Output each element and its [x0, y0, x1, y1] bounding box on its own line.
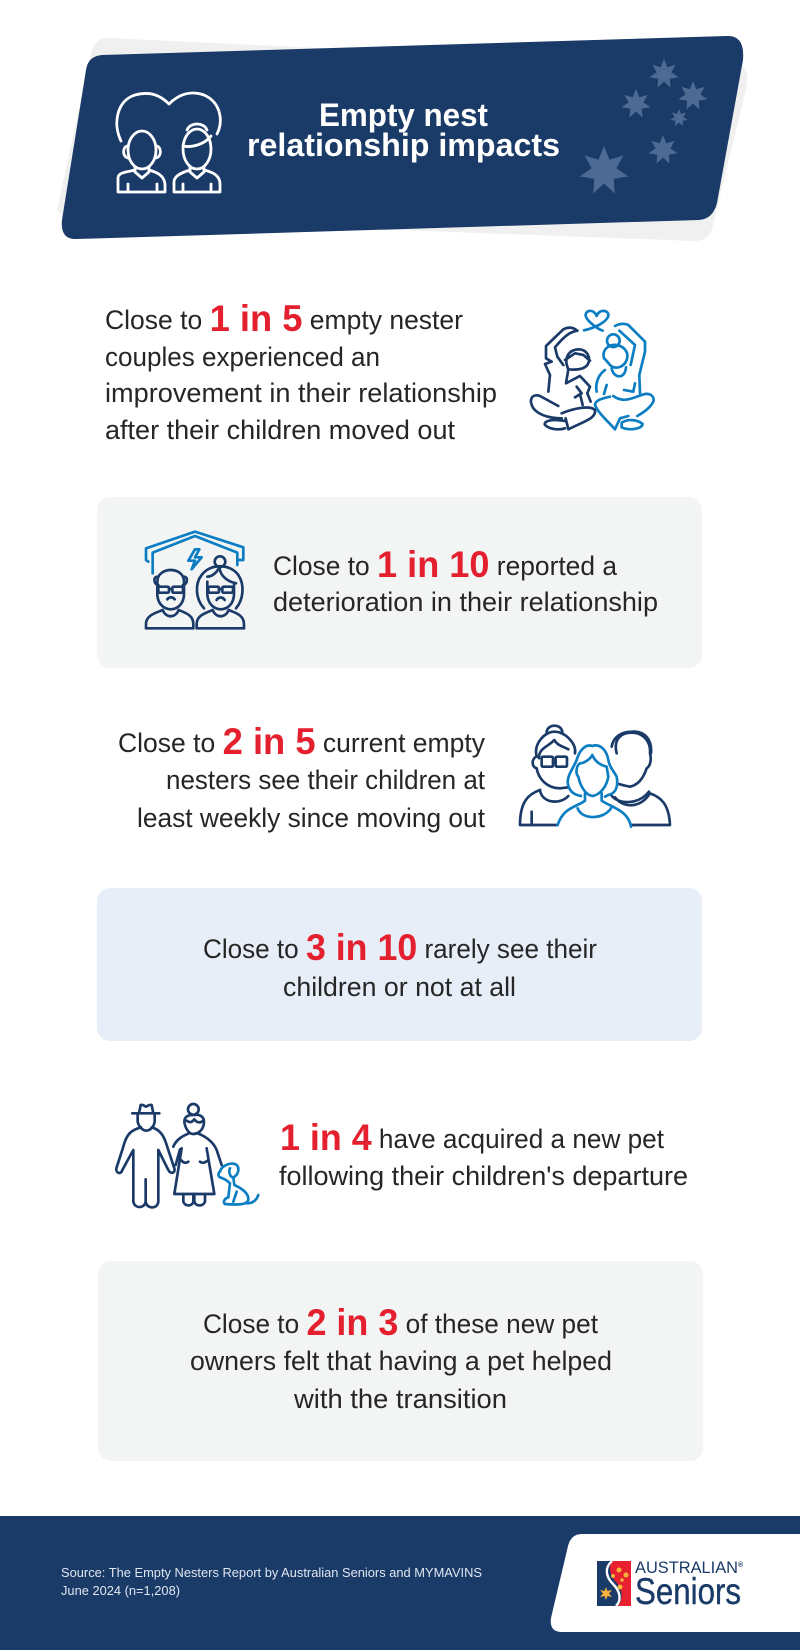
source note [61, 1566, 482, 1598]
stat text: deterioration: reported a [489, 551, 618, 581]
source note: June 2024 (n=1,208) [61, 1584, 180, 1598]
logo wordmark: AUSTRALIAN [635, 1558, 738, 1577]
stars [580, 59, 708, 194]
stat block: see children weekly: nesters see their children at [166, 765, 485, 795]
stat text: pet helped: with the transition [293, 1384, 507, 1414]
stat block: see children weekly: Close to [118, 728, 217, 758]
stat block: improvement: Close to [105, 305, 204, 335]
icon: couple with dog [116, 1104, 258, 1207]
stat block: see children weekly: least weekly since moving out [137, 803, 485, 833]
panel: deterioration [97, 497, 702, 668]
logo wordmark: ® [738, 1561, 744, 1569]
logo wordmark [635, 1558, 744, 1612]
title: Empty nest [319, 97, 488, 133]
title [247, 97, 560, 163]
stat block: new pet: following their children's departure [279, 1161, 688, 1191]
panel: rarely see children [97, 888, 702, 1041]
stat block: improvement [105, 298, 497, 445]
logo panel [551, 1534, 800, 1632]
stat text: pet helped: Close to [203, 1309, 302, 1339]
stat text: pet helped: of these new pet [398, 1309, 598, 1339]
stat text: deterioration: deterioration in their relationship [273, 587, 658, 617]
logo wordmark: Seniors [635, 1571, 741, 1612]
stat block: new pet: have acquired a new pet [372, 1124, 664, 1154]
icon: upset couple under roof [146, 532, 244, 628]
icon: couple in heart [117, 93, 220, 192]
stat text: rarely see [203, 927, 597, 1002]
stat block: see children weekly: current empty [316, 728, 485, 758]
stat block: improvement: improvement in their relationship [105, 378, 497, 408]
stat text: rarely see: 3 in 10 [306, 927, 417, 968]
stat text: pet helped: 2 in 3 [306, 1302, 398, 1343]
stat text: rarely see: children or not at all [283, 972, 516, 1002]
stat block: see children weekly [118, 721, 485, 833]
stat block: improvement: couples experienced an [105, 342, 380, 372]
title: relationship impacts [247, 127, 560, 163]
stat block: improvement: after their children moved out [105, 415, 455, 445]
stat text: deterioration: Close to [273, 551, 372, 581]
stat text: deterioration: 1 in 10 [377, 544, 489, 585]
icon: yoga couple [531, 311, 654, 429]
stat text: pet helped: owners felt that having a pet helped [190, 1346, 612, 1376]
stat block: new pet [279, 1117, 688, 1191]
stat block: new pet: 1 in 4 [280, 1117, 372, 1158]
header banner [57, 36, 748, 241]
panel: pet helped transition [98, 1261, 703, 1461]
footer [0, 1516, 800, 1650]
stat text: rarely see: rarely see their [417, 934, 597, 964]
stat block: see children weekly: 2 in 5 [223, 721, 316, 762]
source note: Source: The Empty Nesters Report by Australian Seniors and MYMAVINS [61, 1566, 482, 1580]
stat block: improvement: empty nester [302, 305, 463, 335]
icon: family of three [520, 726, 670, 827]
stat block: improvement: 1 in 5 [210, 298, 302, 339]
logo mark [597, 1561, 631, 1606]
stat text: deterioration [273, 544, 658, 617]
stat text: pet helped [190, 1302, 612, 1414]
stat text: rarely see: Close to [203, 934, 302, 964]
